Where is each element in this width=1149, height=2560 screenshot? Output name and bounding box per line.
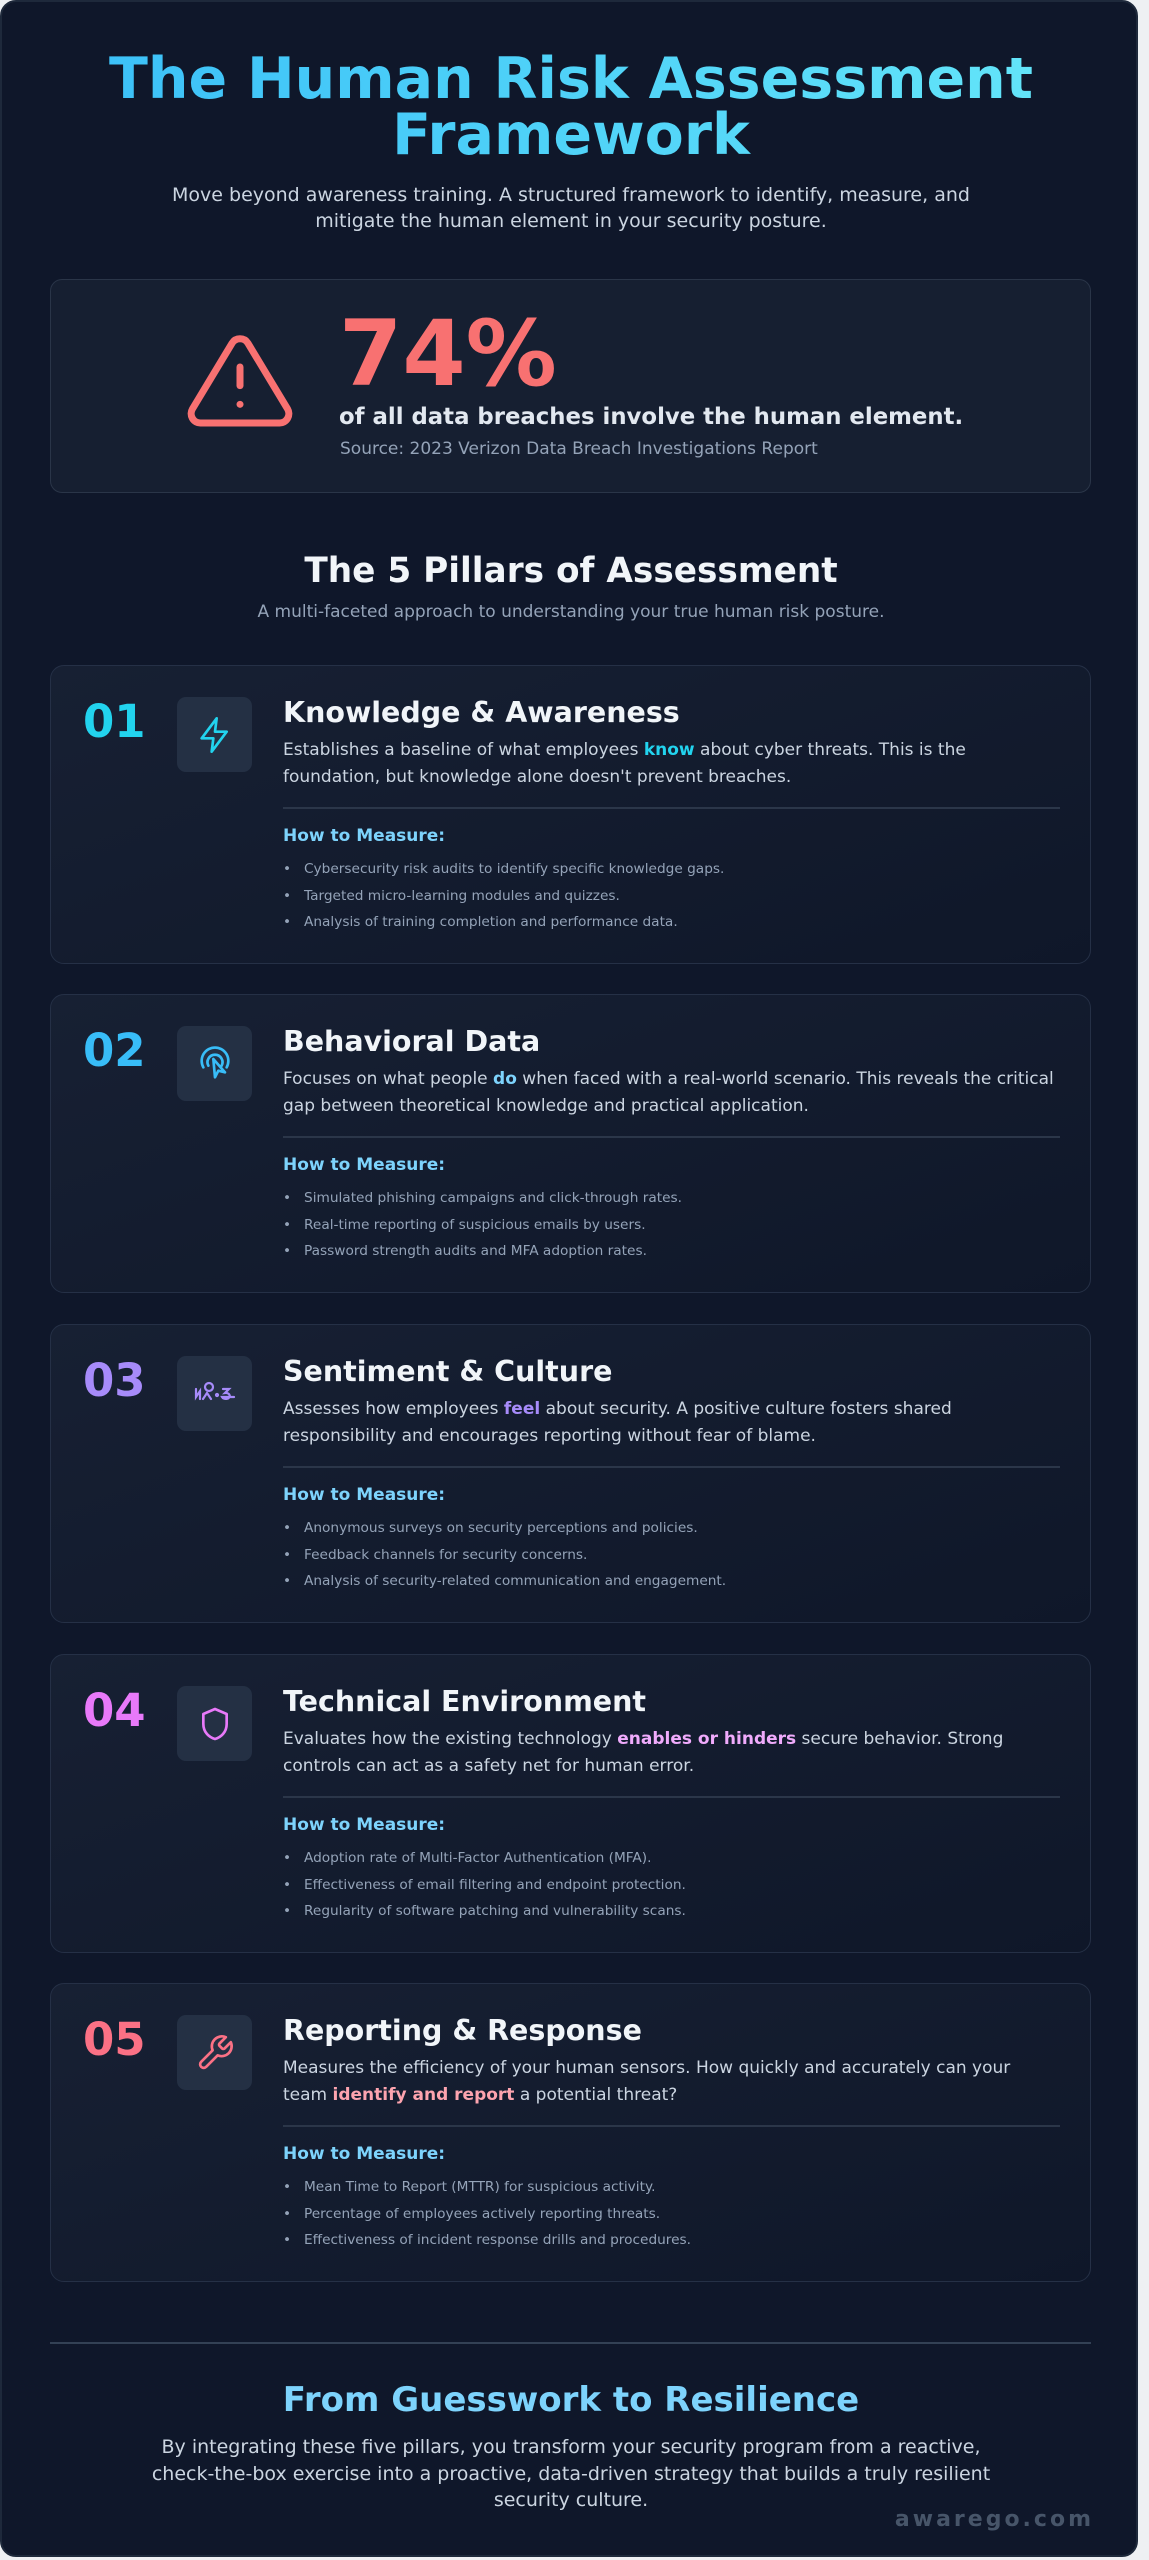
icon: click target (177, 1026, 252, 1101)
description (283, 1729, 1003, 1776)
section subtitle: A multi-faceted approach to understanding your true human risk posture. (258, 602, 884, 622)
how to measure: How to Measure: (283, 1155, 445, 1175)
bullets: Anonymous surveys on security perceptions and policies. (304, 1520, 698, 1536)
bullets (285, 861, 724, 930)
panel: pillar 01 (50, 665, 1091, 964)
panel: pillar 04 (50, 1654, 1091, 1953)
brand: awarego.com (895, 2507, 1094, 2532)
description: responsibility and encourages reporting without fear of blame. (283, 1426, 816, 1446)
stat number: 74% (339, 302, 557, 407)
bullets: Percentage of employees actively reporting threats. (304, 2206, 660, 2222)
footer text: security culture. (494, 2489, 648, 2511)
description: Assesses how employees feel about security. A positive culture fosters shared (283, 1399, 952, 1419)
bullets: Effectiveness of email filtering and endpoint protection. (304, 1876, 686, 1892)
description: foundation, but knowledge alone doesn't prevent breaches. (283, 767, 791, 787)
source: Source: 2023 Verizon Data Breach Investigations Report (340, 439, 818, 459)
subtitle (172, 184, 970, 232)
bullets (285, 2179, 691, 2248)
bullets: Mean Time to Report (MTTR) for suspicious activity. (304, 2179, 655, 2195)
how to measure: How to Measure: (283, 1815, 445, 1835)
bullets (285, 1190, 682, 1259)
description (283, 1399, 952, 1446)
bullets: Simulated phishing campaigns and click-through rates. (304, 1190, 682, 1206)
panel: pillar 03 (50, 1324, 1091, 1623)
description (283, 740, 966, 787)
icon: warning triangle (188, 335, 292, 426)
description: Measures the efficiency of your human sensors. How quickly and accurately can your (283, 2058, 1010, 2078)
bullets: Adoption rate of Multi-Factor Authentication (MFA). (304, 1850, 651, 1866)
subtitle: Move beyond awareness training. A structured framework to identify, measure, and (172, 184, 970, 206)
title: The Human Risk Assessment (109, 46, 1033, 112)
footer text: By integrating these five pillars, you transform your security program from a reactive, (162, 2436, 980, 2458)
subtitle: mitigate the human element in your security posture. (315, 210, 827, 232)
description: Evaluates how the existing technology enables or hinders secure behavior. Strong (283, 1729, 1003, 1749)
number 05: 05 (83, 2013, 146, 2066)
panel: pillar 05 (50, 1983, 1091, 2282)
icon: people (177, 1356, 252, 1431)
number 01: 01 (83, 695, 146, 748)
heading: Technical Environment (283, 1685, 646, 1718)
how to measure: How to Measure: (283, 826, 445, 846)
description: Focuses on what people do when faced with a real-world scenario. This reveals the critical (283, 1069, 1054, 1089)
bullets: Feedback channels for security concerns. (304, 1546, 587, 1562)
section heading: The 5 Pillars of Assessment (304, 551, 838, 591)
footer text: check-the-box exercise into a proactive, data-driven strategy that builds a truly resilient (152, 2462, 990, 2484)
number 04: 04 (83, 1684, 146, 1737)
heading: Sentiment & Culture (283, 1355, 612, 1388)
footer text (152, 2436, 990, 2511)
number 03: 03 (83, 1354, 146, 1407)
bullets: Effectiveness of incident response drills and procedures. (304, 2232, 691, 2248)
description: gap between theoretical knowledge and practical application. (283, 1096, 809, 1116)
description: controls can act as a safety net for human error. (283, 1756, 694, 1776)
description (283, 2058, 1010, 2105)
icon: shield (177, 1686, 252, 1761)
description: team identify and report a potential threat? (283, 2085, 677, 2105)
footer heading: From Guesswork to Resilience (283, 2380, 859, 2420)
bullets: Analysis of training completion and performance data. (304, 914, 678, 930)
stat panel (50, 279, 1091, 493)
heading: Behavioral Data (283, 1025, 540, 1058)
number 02: 02 (83, 1024, 146, 1077)
how to measure: How to Measure: (283, 1485, 445, 1505)
bullets (285, 1850, 686, 1919)
icon: lightning (177, 697, 252, 772)
icon: wrench (177, 2015, 252, 2090)
description: Establishes a baseline of what employees know about cyber threats. This is the (283, 740, 966, 760)
heading: Reporting & Response (283, 2014, 642, 2047)
title (2, 51, 1140, 163)
stat text: of all data breaches involve the human element. (339, 404, 963, 430)
bullets (285, 1520, 726, 1589)
how to measure: How to Measure: (283, 2144, 445, 2164)
bullets: Cybersecurity risk audits to identify specific knowledge gaps. (304, 861, 724, 877)
bullets: Real-time reporting of suspicious emails by users. (304, 1216, 646, 1232)
heading: Knowledge & Awareness (283, 696, 680, 729)
bullets: Analysis of security-related communication and engagement. (304, 1573, 726, 1589)
bullets: Password strength audits and MFA adoption rates. (304, 1243, 647, 1259)
description (283, 1069, 1054, 1116)
title: Framework (392, 102, 750, 168)
bullets: Targeted micro-learning modules and quizzes. (304, 888, 620, 904)
panel: pillar 02 (50, 994, 1091, 1293)
bullets: Regularity of software patching and vulnerability scans. (304, 1903, 686, 1919)
